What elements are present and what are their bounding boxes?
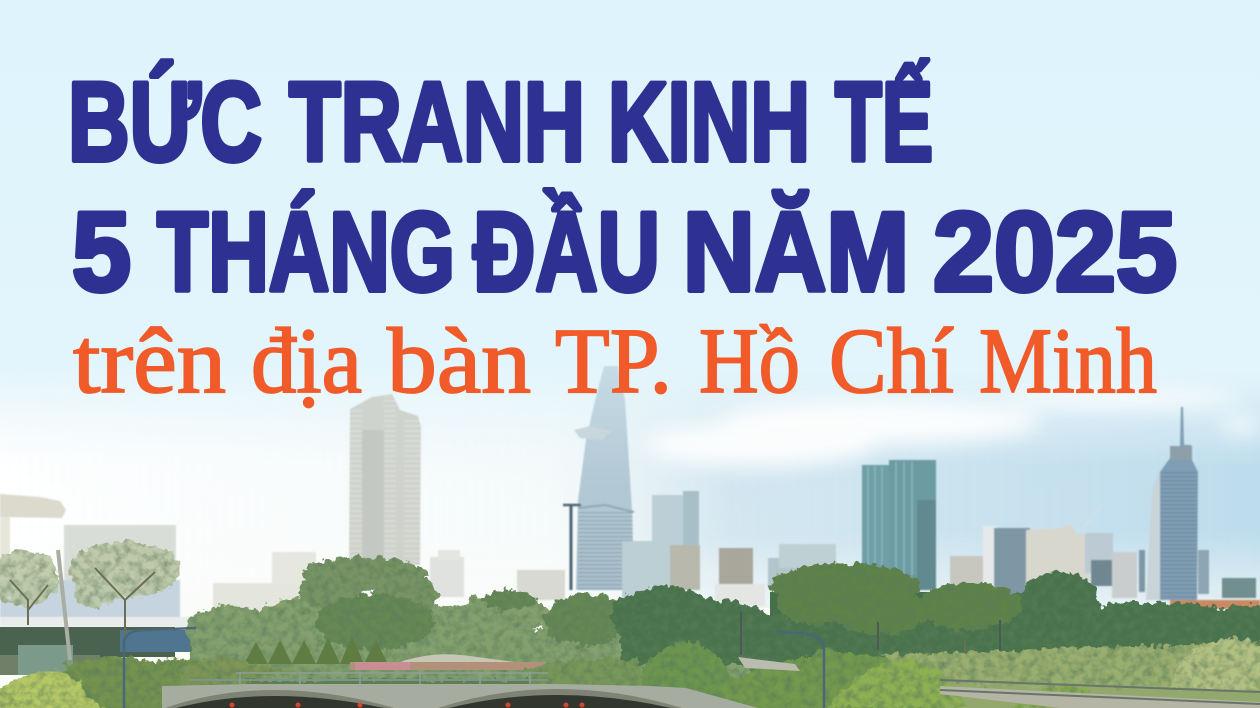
title line 2: THÁNG: [157, 190, 455, 314]
back tree band: [0, 542, 1260, 680]
path and flowers: [350, 654, 550, 670]
skyline buildings: [0, 366, 1260, 627]
tree trunks: [10, 568, 965, 680]
pale left trees: [0, 542, 181, 608]
twin teal tower: [862, 460, 936, 590]
ground underlay: [0, 625, 1260, 708]
lamp pole: [58, 550, 70, 660]
subtitle: [73, 310, 1157, 413]
title line 1: BỨC: [68, 60, 262, 184]
subtitle: bàn: [387, 310, 531, 413]
bridge: [162, 672, 758, 708]
mid distance park trees: [186, 595, 750, 680]
title line 2: ĐẦU: [473, 190, 660, 314]
centre glass blocks: [652, 495, 686, 565]
title line 2: 2025: [933, 190, 1177, 314]
left hall with roof: [0, 494, 204, 627]
clouds: [645, 389, 1260, 467]
trees and park: [0, 542, 1260, 708]
subtitle: TP.: [555, 310, 672, 413]
subtitle: Chí: [829, 310, 954, 413]
hotel group: [950, 504, 1137, 613]
far pale buildings: [272, 552, 316, 592]
near bushes: [0, 638, 1260, 708]
title line 1: [68, 60, 933, 184]
subtitle: địa: [251, 310, 362, 413]
background: sky: [0, 384, 1260, 688]
title line 1: KINH: [608, 60, 810, 184]
dark trees right half: [610, 572, 1260, 665]
Bitexco tower: [574, 366, 634, 590]
Vietcombank tower: [1146, 407, 1198, 600]
subtitle: Hồ: [699, 310, 800, 413]
lamp mast: [563, 505, 581, 590]
promenade: [738, 657, 1260, 708]
subtitle: Minh: [979, 310, 1157, 413]
hazy tower: [349, 394, 421, 565]
near bush underlays: [0, 648, 1260, 708]
title line 2: [72, 190, 1177, 314]
street lamps: [124, 628, 824, 708]
left hedge and structures: [0, 627, 175, 657]
crown near hazy tower: [298, 557, 437, 620]
cone shrubs: [244, 636, 388, 664]
title line 2: 5: [72, 190, 131, 314]
title line 1: TẾ: [835, 60, 933, 184]
title line 1: TRANH: [289, 60, 585, 184]
subtitle: trên: [73, 310, 226, 413]
title line 2: NĂM: [683, 190, 909, 314]
arches: [165, 690, 394, 708]
